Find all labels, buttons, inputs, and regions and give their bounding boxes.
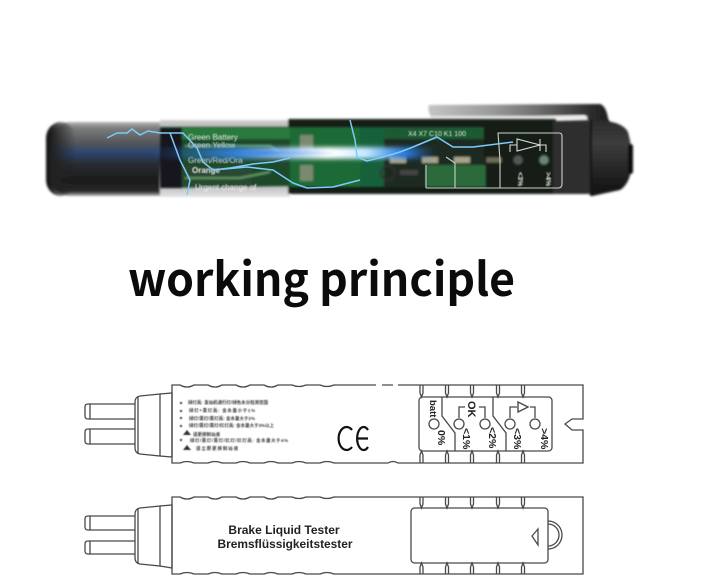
tabs — [420, 497, 524, 574]
battery cover — [411, 508, 562, 563]
printed pen legend text: >4% — [544, 172, 551, 187]
pen clip — [428, 104, 610, 124]
product name: Brake Liquid Tester — [228, 523, 340, 537]
printed pen legend text: Green Yellow — [188, 141, 235, 150]
CE mark — [339, 427, 368, 450]
diagram: back of tester — [85, 497, 583, 574]
printed panel outline — [426, 133, 562, 188]
collar — [135, 393, 172, 457]
probes — [85, 516, 135, 554]
instruction text: 请立即更换制动液 — [196, 445, 239, 452]
warning triangle on pen — [510, 139, 546, 152]
instruction text: 绿灯/黄灯/黄灯/红灯亮: 含水量大于3%以上 — [189, 422, 275, 429]
photo: brake fluid tester pen with lightning — [46, 104, 633, 197]
instruction text: 绿灯/黄灯/黄灯/红灯/红灯亮: 含水量大于4% — [190, 437, 288, 444]
indicator panel — [419, 397, 552, 451]
instruction text — [180, 399, 288, 452]
indicator labels: <1% — [460, 428, 472, 450]
collar — [135, 505, 172, 568]
circuit board — [160, 127, 549, 188]
indicator labels: >4% — [538, 428, 550, 450]
printed pen legend text: Green Battery — [188, 133, 238, 142]
indicator labels: OK — [465, 401, 477, 418]
instruction text: 绿灯+黄灯亮: 含水量小于1% — [189, 407, 255, 414]
tabs — [420, 385, 524, 463]
indicator labels: 0% — [435, 430, 447, 446]
title: working principle — [128, 244, 515, 310]
printed pen legend text — [188, 131, 551, 192]
indicator labels: <3% — [511, 428, 523, 450]
instruction text: 绿灯/黄灯/黄灯亮: 含水量大于2% — [189, 415, 255, 422]
tester body outline — [172, 385, 583, 463]
indicator labels: <2% — [486, 427, 498, 449]
pen body — [46, 119, 633, 197]
instruction text: 绿灯亮: 发动机通行灯/绿色水分检测范围 — [188, 399, 269, 406]
indicator labels: batt — [427, 400, 438, 418]
probes — [85, 404, 135, 444]
light beam — [150, 147, 435, 159]
printed pen legend text: Orange — [192, 166, 221, 175]
product name — [218, 523, 353, 551]
lightning arcs — [107, 120, 513, 195]
printed pen legend text: X4 X7 C10 K1 100 — [408, 131, 466, 138]
indicator labels — [427, 400, 550, 450]
printed pen legend text: <3% — [516, 172, 523, 187]
tester body outline — [172, 497, 583, 574]
printed pen legend text: Urgent change of — [195, 183, 257, 192]
instruction text: 请更换制动液 — [193, 431, 221, 438]
printed pen legend text: Green/Red/Ora — [188, 156, 243, 165]
product name: Bremsflüssigkeitstester — [218, 537, 353, 551]
diagram: front of tester — [85, 385, 583, 463]
